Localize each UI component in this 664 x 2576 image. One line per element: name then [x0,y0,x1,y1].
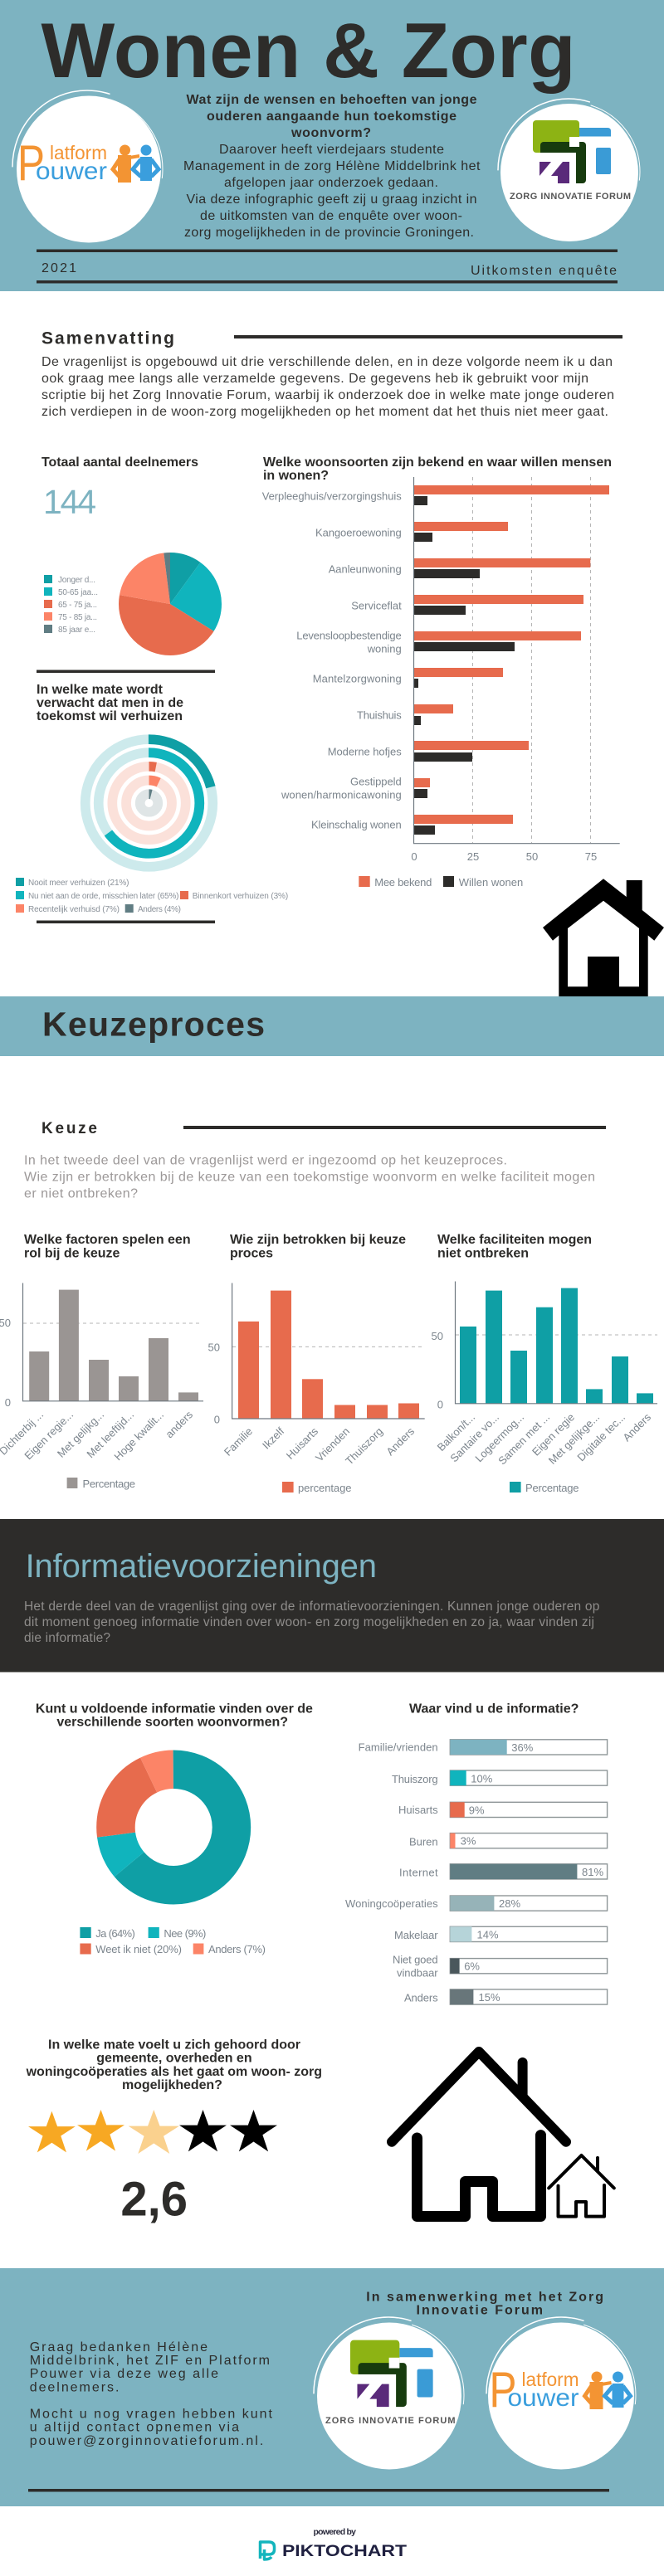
subtitle: Uitkomsten enquête [471,264,617,278]
panel: voldoende informatie [36,1702,313,1955]
text block: thanks: pouwer@zorginnovatieforum.nl. [30,2434,263,2448]
progress bars: Woningcoöperaties [345,1897,438,1910]
bar chart: betrokken: Vrienden [313,1425,352,1464]
text block: thanks: Middelbrink, het ZIF en Platform [30,2354,270,2368]
branding: powered by piktochart: PIKTOCHART [282,2543,407,2560]
text block: intro: Daarover heeft vierdejaars studente [219,143,444,157]
text block: informatie: Het derde deel van de vragenlijst ging over de informatievoorzieningen. Kunnen jonge ouderen op [24,1600,599,1614]
heading [26,2038,322,2092]
panel: totaal aantal deelnemers [42,455,198,635]
icon: rating stars [28,2110,277,2154]
banner: informatievoorzieningen [0,1519,664,1673]
heading [24,1233,191,1260]
logo: Platform Pouwer: latform [50,142,107,163]
legend: verhuizen [16,878,288,914]
bar chart: faciliteiten: Digitale tec... [574,1411,627,1463]
progress bars: Buren [409,1835,438,1848]
legend: verhuizen: Nooit meer verhuizen (21%) [28,879,129,888]
bar chart: faciliteiten: Met gelijkge... [546,1411,602,1467]
bar chart: woonsoorten: 0 [411,850,417,863]
progress bars: Thuiszorg [392,1773,438,1785]
text block: informatie: die informatie? [24,1631,110,1645]
bar chart: woonsoorten: woning [367,643,402,655]
bar chart: faciliteiten: Samen met ... [496,1411,552,1467]
bar chart: woonsoorten: Mantelzorgwoning [313,673,402,685]
banner: keuzeproces: Keuzeproces [42,1006,265,1044]
bar chart: faciliteiten: Anders [620,1410,653,1444]
progress bars: vindbaar [397,1966,438,1979]
progress bars: 6% [464,1960,480,1973]
legend: donut: Nee (9%) [164,1927,206,1940]
text block: keuze: In het tweede deel van de vragenlijst werd er ingezoomd op het keuzeproces. [24,1153,507,1167]
logo: Platform Pouwer [486,2317,636,2470]
legend: age: 50-65 jaa... [58,588,98,597]
text block: keuze [24,1153,595,1201]
heading: Kunt u voldoende informatie vinden over de [36,1702,313,1716]
panel: header [0,0,664,291]
logo: Zorg Innovatie Forum [314,2317,464,2470]
text block: summary: ook graag mee langs alle verzamelde gegevens. De gegevens heb ik gebruikt voor mijn [42,372,588,386]
text block: summary: scriptie bij het Zorg Innovatie Forum, waarbij ik onderzoek doe in welke mate jonge ouderen [42,388,614,402]
bar chart: faciliteiten: 0 [437,1399,443,1410]
progress bars: 15% [478,1991,500,2004]
bar chart: betrokken: Thuiszorg [343,1425,385,1467]
banner: keuzeproces [0,996,664,1056]
text block: keuze: er niet ontbreken? [24,1187,138,1201]
heading: In welke mate wordt [37,683,164,697]
donut chart [115,1770,232,1885]
bar chart: woonsoorten: wonen/harmonicawoning [281,789,402,801]
text block: thanks [30,2340,273,2448]
heading [37,683,183,723]
icon: large and small house [392,2052,614,2217]
year: 2021 [42,261,76,275]
bar chart: factoren [0,1283,203,1463]
heading: Welke faciliteiten mogen [437,1233,592,1247]
text block: intro: Management in de zorg Hélène Middelbrink het [183,159,481,173]
heading: Totaal aantal deelnemers [42,455,198,470]
heading: samenwerking: In samenwerking met het Zorg [366,2291,603,2305]
legend: woonsoorten: Willen wonen [459,876,523,889]
text block: intro: de uitkomsten van de enquête over woon- [200,209,462,223]
bar chart: faciliteiten: Logeermog... [472,1411,526,1464]
heading: toekomst wil verhuizen [37,709,183,723]
bar chart: betrokken: 0 [214,1413,220,1425]
bar chart: factoren: Eigen regie... [22,1409,76,1462]
heading: In welke mate voelt u zich gehoord door [48,2038,300,2053]
legend: factoren: Percentage [83,1478,135,1490]
heading [230,1233,406,1260]
bar chart: woonsoorten: Levensloopbestendige [296,630,402,642]
bar chart: betrokken: Huisarts [284,1424,320,1462]
icon: house [543,879,664,996]
heading: woningcoöperaties als het gaat om woon- zorg [26,2065,322,2079]
panel: woonsoorten [262,455,620,889]
progress bars: 14% [476,1928,499,1941]
bar chart: betrokken: Familie [222,1425,255,1458]
icon: piktochart [261,2542,274,2559]
legend: woonsoorten: Mee bekend [374,876,432,889]
bar chart: factoren: Met gelijkg... [55,1409,106,1460]
big number: 144 [43,483,96,521]
legend: betrokken: percentage [298,1482,352,1494]
bar chart: woonsoorten: Gestippeld [350,776,402,788]
bar chart: faciliteiten: Santaire vo... [447,1411,501,1464]
text block: informatie [24,1600,599,1645]
legend: verhuizen: Binnenkort verhuizen (3%) [193,892,288,901]
heading: verwacht dat men in de [37,696,183,710]
text block: thanks: Graag bedanken Hélène [30,2340,208,2354]
heading: in wonen? [263,469,329,483]
radial chart [85,739,212,867]
bar chart: faciliteiten: Eigen regie [530,1411,577,1458]
heading: mogelijkheden? [122,2078,222,2092]
text block: intro: zorg mogelijkheden in de provincie Groningen. [184,226,474,240]
text block: informatie: dit moment genoeg informatie vinden over woon- en zorg mogelijkheden en zo ja, waar vinden zij [24,1615,594,1629]
panel: waar vind u de informatie [345,1702,608,2004]
legend: age [44,575,98,635]
bar chart: woonsoorten: 25 [467,850,479,863]
text block: thanks: deelnemers. [30,2380,119,2394]
progress bars: 28% [499,1897,520,1910]
progress bars: Niet goed [393,1953,438,1965]
bar chart: factoren: Met leeftijd... [84,1409,136,1460]
legend: donut: Weet ik niet (20%) [95,1943,182,1955]
text block: intro: woonvorm? [290,126,371,140]
text block: summary [42,355,614,419]
logo: Zorg Innovatie Forum: ZORG INNOVATIE FORUM [325,2416,455,2426]
progress bars: Makelaar [394,1929,438,1941]
bar chart: betrokken: 50 [208,1341,220,1353]
text block: summary: De vragenlijst is opgebouwd uit drie verschillende delen, en in deze volgorde neem ik u dan [42,355,613,369]
text block: thanks: u altijd contact opnemen via [30,2421,239,2435]
logo: Platform Pouwer: ouwer [36,158,107,185]
logo: Platform Pouwer: ouwer [508,2384,579,2412]
text block: intro: Wat zijn de wensen en behoeften van jonge [186,93,477,107]
progress bars: 3% [461,1835,476,1847]
progress bars: 81% [582,1866,603,1878]
panel: gehoord [26,2038,322,2227]
legend: age: 85 jaar e... [58,626,95,635]
heading: Waar vind u de informatie? [409,1702,579,1716]
progress bars: Anders [404,1992,438,2004]
legend: verhuizen: Anders (4%) [138,905,181,914]
text block: summary: zich verdiepen in de woon-zorg mogelijkheden op het moment dat het thuis niet meer gaat. [42,405,608,419]
bar chart: factoren: Hoge kwalit... [111,1409,166,1463]
branding: powered by piktochart: powered by [314,2527,356,2537]
heading: niet ontbreken [437,1246,529,1260]
bar chart: woonsoorten: Kangoeroewoning [315,527,402,539]
panel: samenvatting [42,329,622,419]
bar chart: betrokken: Anders [383,1424,417,1458]
logo: Platform Pouwer [12,90,163,243]
bar chart: woonsoorten: Kleinschalig wonen [311,819,402,831]
text block: thanks: Mocht u nog vragen hebben kunt [30,2408,273,2422]
logo: Platform Pouwer: P [17,135,45,191]
legend: age: Jonger d... [58,576,95,585]
heading: Welke woonsoorten zijn bekend en waar willen mensen [263,455,612,470]
heading: samenwerking: Innovatie Forum [417,2304,543,2318]
heading: Informatievoorzieningen [26,1548,377,1585]
progress bars: 9% [469,1804,485,1817]
heading: Welke factoren spelen een [24,1233,191,1247]
logo: Zorg Innovatie Forum [498,99,640,241]
panel: factoren [0,1233,203,1490]
bar chart: factoren: 0 [5,1396,11,1409]
legend: verhuizen: Recentelijk verhuisd (7%) [28,905,120,914]
title: Wonen & Zorg [42,7,576,94]
logo: Zorg Innovatie Forum: ZORG INNOVATIE FORUM [510,192,631,202]
bar chart: betrokken [208,1283,425,1467]
bar chart: faciliteiten: 50 [432,1330,443,1342]
text block: intro [183,93,481,240]
text block: keuze: Wie zijn er betrokken bij de keuze van een toekomstige woonvorm en welke faciliteit mogen [24,1170,595,1185]
branding: powered by piktochart [261,2527,407,2560]
bar chart: faciliteiten: Balkon/t... [435,1411,477,1454]
bar chart: betrokken: Ikzelf [260,1424,286,1452]
heading: Samenvatting [42,329,174,348]
bar chart: woonsoorten [262,477,620,863]
bar chart: factoren: anders [163,1408,195,1440]
legend: donut [80,1927,266,1955]
panel: verhuizen [16,683,288,914]
bar chart: woonsoorten: 75 [585,850,597,863]
panel: betrokken [208,1233,425,1494]
score: 2,6 [120,2173,188,2227]
legend: verhuizen: Nu niet aan de orde, misschien later (65%) [28,892,179,901]
legend: age: 75 - 85 ja... [58,613,97,622]
text block: intro: Via deze infographic geeft zij u graag inzicht in [186,192,476,207]
progress bars: 10% [471,1772,493,1785]
bar chart: woonsoorten: Aanleunwoning [329,563,402,576]
panel: keuze intro [24,1120,606,1201]
bar chart: woonsoorten: Moderne hofjes [328,746,402,758]
progress bars: 36% [511,1741,534,1754]
progress bars: Internet [399,1867,438,1879]
legend: donut: Anders (7%) [208,1943,266,1955]
legend: donut: Ja (64%) [95,1927,135,1940]
bar chart: woonsoorten: Thuishuis [357,709,402,722]
heading [36,1702,313,1729]
legend: woonsoorten [359,876,523,889]
legend: age: 65 - 75 ja... [58,601,97,610]
text block: intro: afgelopen jaar onderzoek gedaan. [224,176,438,190]
heading: samenwerking [366,2291,603,2318]
heading: rol bij de keuze [24,1246,120,1260]
progress bars [345,1740,608,2004]
heading [437,1233,592,1260]
pie chart: age [144,578,196,630]
heading: Wie zijn betrokken bij keuze [230,1233,406,1247]
panel: footer [0,2268,664,2506]
bar chart: faciliteiten [432,1281,657,1467]
bar chart: woonsoorten: Serviceflat [351,600,402,612]
heading: gemeente, overheden en [96,2052,252,2066]
text block: thanks: Pouwer via deze weg alle [30,2367,218,2381]
heading: proces [230,1246,273,1260]
legend: faciliteiten: Percentage [525,1482,579,1494]
bar chart: woonsoorten: Verpleeghuis/verzorgingshuis [262,490,402,503]
logo: Platform Pouwer: P [490,2362,516,2418]
bar chart: woonsoorten: 50 [526,850,538,863]
heading [263,455,612,483]
logo: Platform Pouwer: latform [521,2369,579,2390]
panel: faciliteiten [432,1233,657,1494]
progress bars: Familie/vrienden [359,1741,438,1754]
heading: verschillende soorten woonvormen? [56,1715,288,1729]
text block: intro: ouderen aangaande hun toekomstige [207,110,456,124]
progress bars: Huisarts [398,1804,438,1816]
heading: Keuze [42,1120,97,1137]
